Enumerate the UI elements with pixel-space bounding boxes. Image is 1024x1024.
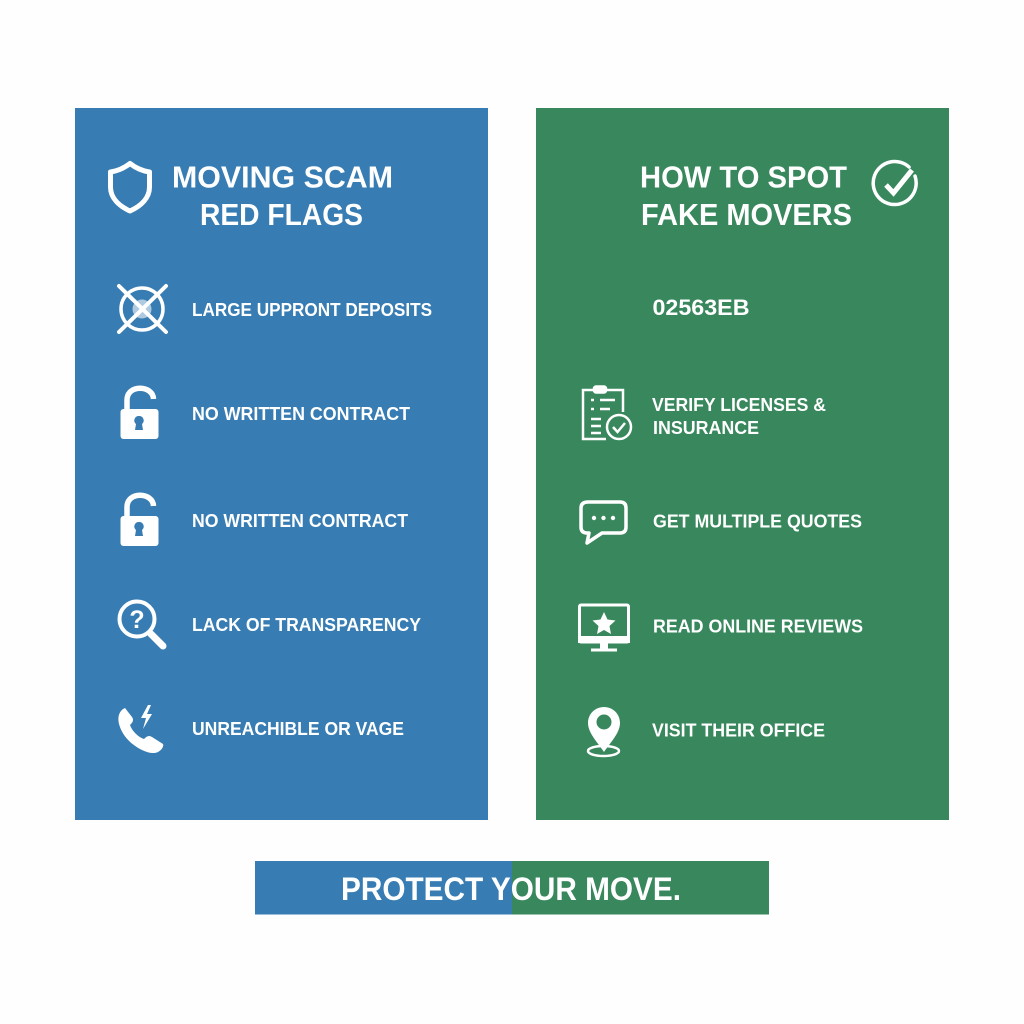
icon: magnifier with question mark	[120, 602, 163, 646]
icon: circled check mark	[873, 162, 916, 205]
icon: shield	[110, 164, 150, 211]
icon: open lock	[120, 495, 158, 546]
label: verify licenses and insurance: INSURANCE	[653, 417, 759, 438]
icon: monitor with star	[578, 605, 630, 652]
banner: protect your move	[255, 861, 769, 914]
label: verify licenses and insurance	[652, 394, 826, 438]
label: verify licenses and insurance: VERIFY LICENSES &	[652, 394, 826, 415]
heading: how to spot fake movers: HOW TO SPOT	[640, 160, 847, 194]
icon: clipboard with check badge	[583, 386, 631, 439]
icon: magnifier with question mark: ?	[129, 606, 145, 634]
label: visit their office: VISIT THEIR OFFICE	[652, 720, 825, 740]
label: lack of transparency: LACK OF TRANSPARENCY	[192, 614, 422, 635]
heading: moving scam red flags: MOVING SCAM	[172, 160, 393, 194]
panel: moving scam red flags	[75, 108, 488, 820]
heading: how to spot fake movers: FAKE MOVERS	[641, 197, 852, 232]
text: code 02563EB: 02563EB	[652, 295, 750, 320]
label: get multiple quotes: GET MULTIPLE QUOTES	[653, 510, 862, 532]
heading: how to spot fake movers	[640, 160, 852, 232]
panel: how to spot fake movers	[536, 108, 949, 820]
icon: location pin	[588, 707, 620, 756]
icon: speech bubble	[581, 502, 626, 543]
icon: phone with lightning bolt	[118, 705, 163, 753]
heading: moving scam red flags	[172, 160, 393, 232]
icon: open lock	[120, 388, 158, 439]
label: read online reviews: READ ONLINE REVIEWS	[653, 616, 863, 636]
heading: moving scam red flags: RED FLAGS	[200, 197, 363, 232]
icon: crossed-out coin	[119, 286, 166, 332]
banner: protect your move: PROTECT YOUR MOVE.	[341, 871, 681, 907]
label: unreachable or vague: UNREACHIBLE OR VAGE	[192, 718, 404, 739]
label: large upfront deposits: LARGE UPPRONT DEPOSITS	[192, 299, 432, 320]
label: no written contract repeated: NO WRITTEN CONTRACT	[192, 510, 409, 531]
label: no written contract: NO WRITTEN CONTRACT	[192, 403, 411, 424]
